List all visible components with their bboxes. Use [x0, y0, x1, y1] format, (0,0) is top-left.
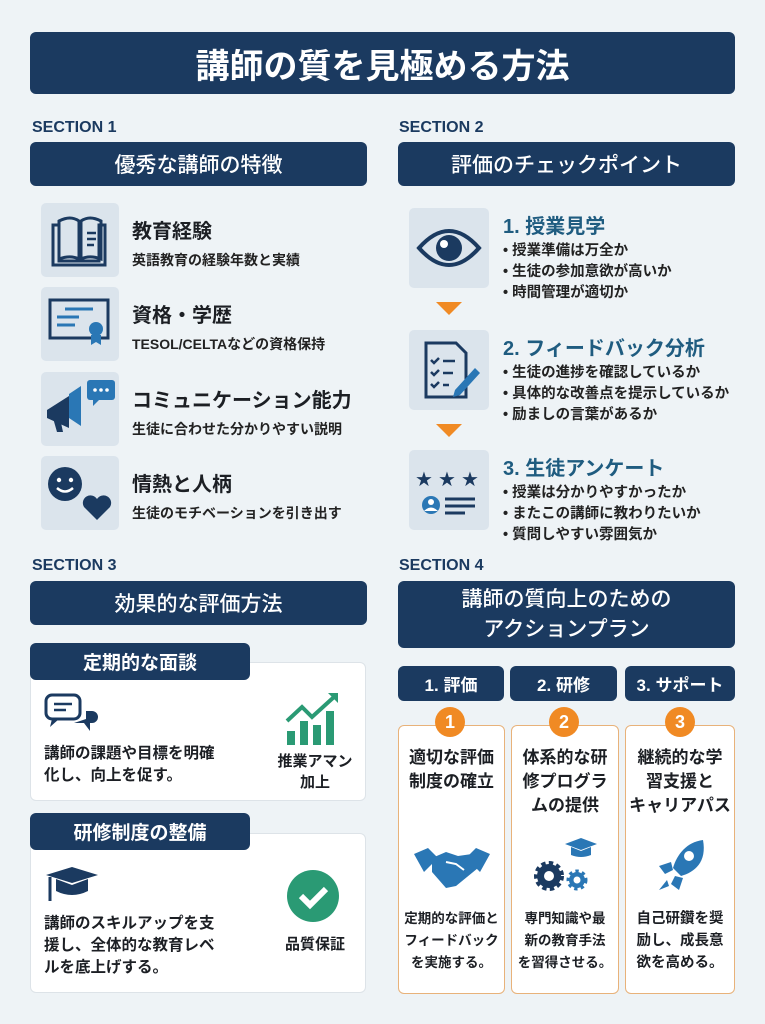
- body: 専門知識や最: [524, 911, 606, 926]
- arrow: [436, 424, 462, 437]
- icon: rocket: [659, 840, 704, 890]
- item: passion: [41, 456, 342, 530]
- body: [518, 911, 612, 970]
- section 1 header: 優秀な講師の特徴: [114, 154, 282, 177]
- label: 加上: [300, 774, 330, 791]
- card: training system: [30, 813, 366, 993]
- text: [132, 474, 342, 521]
- tab 2: 2. 研修: [537, 676, 590, 695]
- tab: [30, 643, 250, 680]
- body: [636, 910, 724, 971]
- tab 3: [625, 666, 735, 701]
- item: qualifications: [41, 287, 325, 361]
- tabs section 4: [398, 666, 735, 701]
- title: 継続的な学: [638, 748, 722, 767]
- tab 2: [510, 666, 617, 701]
- title: 修プログラ: [522, 772, 608, 791]
- step 1: observation: [409, 208, 672, 301]
- text: [503, 216, 672, 301]
- text: 英語教育の経験年数と実績: [132, 252, 300, 268]
- title: 適切な評価: [409, 748, 494, 767]
- body: 励し、成長意: [636, 933, 724, 949]
- section 4 header: アクションプラン: [483, 618, 650, 640]
- text: • 授業準備は万全か: [503, 243, 628, 259]
- icon: growth chart: [286, 693, 338, 745]
- number badge: 1: [445, 712, 455, 732]
- section 3 label: SECTION 3: [32, 557, 116, 574]
- text: 1. 授業見学: [503, 216, 605, 238]
- text: [44, 744, 215, 784]
- body: 自己研鑽を奨: [636, 911, 724, 927]
- title: [409, 748, 494, 791]
- step 3: survey: [409, 450, 701, 543]
- text: • 生徒の進捗を確認しているか: [503, 365, 700, 381]
- section 1 label: SECTION 1: [32, 119, 116, 136]
- number badge: [435, 707, 465, 737]
- body: 新の教育手法: [524, 933, 606, 948]
- icon: book: [41, 203, 119, 277]
- title: 講師の質を見極める方法: [196, 48, 570, 86]
- text: 2. フィードバック分析: [503, 338, 705, 360]
- text: 3. 生徒アンケート: [503, 458, 664, 480]
- item: communication: [41, 372, 352, 446]
- text: 教育経験: [132, 221, 212, 243]
- tab: 研修制度の整備: [73, 823, 206, 844]
- section 4 header: [398, 581, 735, 648]
- action card 2: [511, 707, 619, 994]
- body: を習得させる。: [518, 955, 612, 970]
- item: education experience: [41, 203, 300, 277]
- icon: gears cap: [534, 838, 597, 891]
- section 2 label: SECTION 2: [399, 119, 483, 136]
- title: [30, 32, 735, 94]
- icon: eye: [409, 208, 489, 288]
- section 4 label: SECTION 4: [399, 557, 483, 574]
- section 2 header: 評価のチェックポイント: [451, 154, 682, 177]
- number badge: [549, 707, 579, 737]
- title: キャリアパス: [629, 796, 731, 815]
- title: ムの提供: [531, 796, 599, 815]
- icon: stars profile: ★: [461, 467, 479, 491]
- section 2 header: [398, 142, 735, 186]
- text: コミュニケーション能力: [132, 390, 352, 412]
- step 2: feedback: [409, 330, 729, 423]
- number badge: 2: [559, 712, 569, 732]
- icon: certificate: [41, 287, 119, 361]
- icon: grad cap: [46, 867, 98, 901]
- text: TESOL/CELTAなどの資格保持: [132, 336, 325, 352]
- text: [132, 390, 352, 437]
- icon: smile heart: [41, 456, 119, 530]
- text: 援し、全体的な教育レベ: [44, 937, 215, 954]
- body: 欲を高める。: [636, 955, 724, 971]
- action card 3: [625, 707, 735, 994]
- text: • 質問しやすい雰囲気か: [503, 527, 657, 543]
- body: [404, 911, 499, 970]
- section 3 header: 効果的な評価方法: [114, 593, 282, 616]
- arrow: [436, 302, 462, 315]
- text: ルを底上げする。: [44, 959, 168, 976]
- title: 制度の確立: [409, 772, 494, 791]
- section 3 header: [30, 581, 367, 625]
- title: [629, 748, 731, 815]
- section 1 header: [30, 142, 367, 186]
- label: 品質保証: [285, 936, 345, 953]
- text: 生徒のモチベーションを引き出す: [132, 505, 342, 521]
- tab 1: 1. 評価: [425, 676, 477, 695]
- text: 資格・学歴: [132, 305, 232, 327]
- icon: stars profile: ★: [415, 467, 433, 491]
- text: 情熱と人柄: [132, 474, 232, 496]
- text: 生徒に合わせた分かりやすい説明: [132, 421, 342, 437]
- text: • 励ましの言葉があるか: [503, 407, 657, 423]
- text: 講師の課題や目標を明確: [44, 745, 215, 762]
- icon: check circle: [287, 870, 339, 922]
- icon: stars profile: ★: [438, 467, 456, 491]
- card: regular interview: [30, 643, 366, 801]
- action card 1: [398, 707, 505, 994]
- title: 習支援と: [646, 772, 714, 791]
- title: 体系的な研: [522, 748, 608, 767]
- tab: 定期的な面談: [83, 653, 197, 674]
- text: • 授業は分かりやすかったか: [503, 485, 686, 501]
- body: 定期的な評価と: [404, 911, 499, 926]
- number badge: 3: [675, 712, 685, 732]
- text: [503, 338, 729, 423]
- icon: chat bubbles: [44, 694, 98, 731]
- tab 1: [398, 666, 504, 701]
- icon: checklist: [409, 330, 489, 410]
- text: [503, 458, 701, 543]
- text: 講師のスキルアップを支: [44, 915, 215, 932]
- text: [44, 914, 215, 976]
- number badge: [665, 707, 695, 737]
- text: [132, 304, 325, 352]
- text: • 時間管理が適切か: [503, 285, 628, 301]
- tab 3: 3. サポート: [637, 676, 723, 695]
- section 4 header: 講師の質向上のための: [462, 588, 672, 610]
- text: • 具体的な改善点を提示しているか: [503, 386, 729, 402]
- tab: [30, 813, 250, 850]
- text: [132, 220, 300, 268]
- label: 推業アマン: [277, 753, 352, 770]
- icon: megaphone: [41, 372, 119, 446]
- body: を実施する。: [411, 955, 492, 970]
- icon: handshake: [414, 848, 490, 888]
- text: • またこの講師に教わりたいか: [503, 506, 701, 522]
- body: フィードバック: [404, 933, 499, 948]
- icon: stars profile: [409, 450, 489, 530]
- label: [277, 753, 352, 791]
- title: [522, 748, 608, 815]
- text: 化し、向上を促す。: [44, 767, 182, 784]
- text: • 生徒の参加意欲が高いか: [503, 264, 672, 280]
